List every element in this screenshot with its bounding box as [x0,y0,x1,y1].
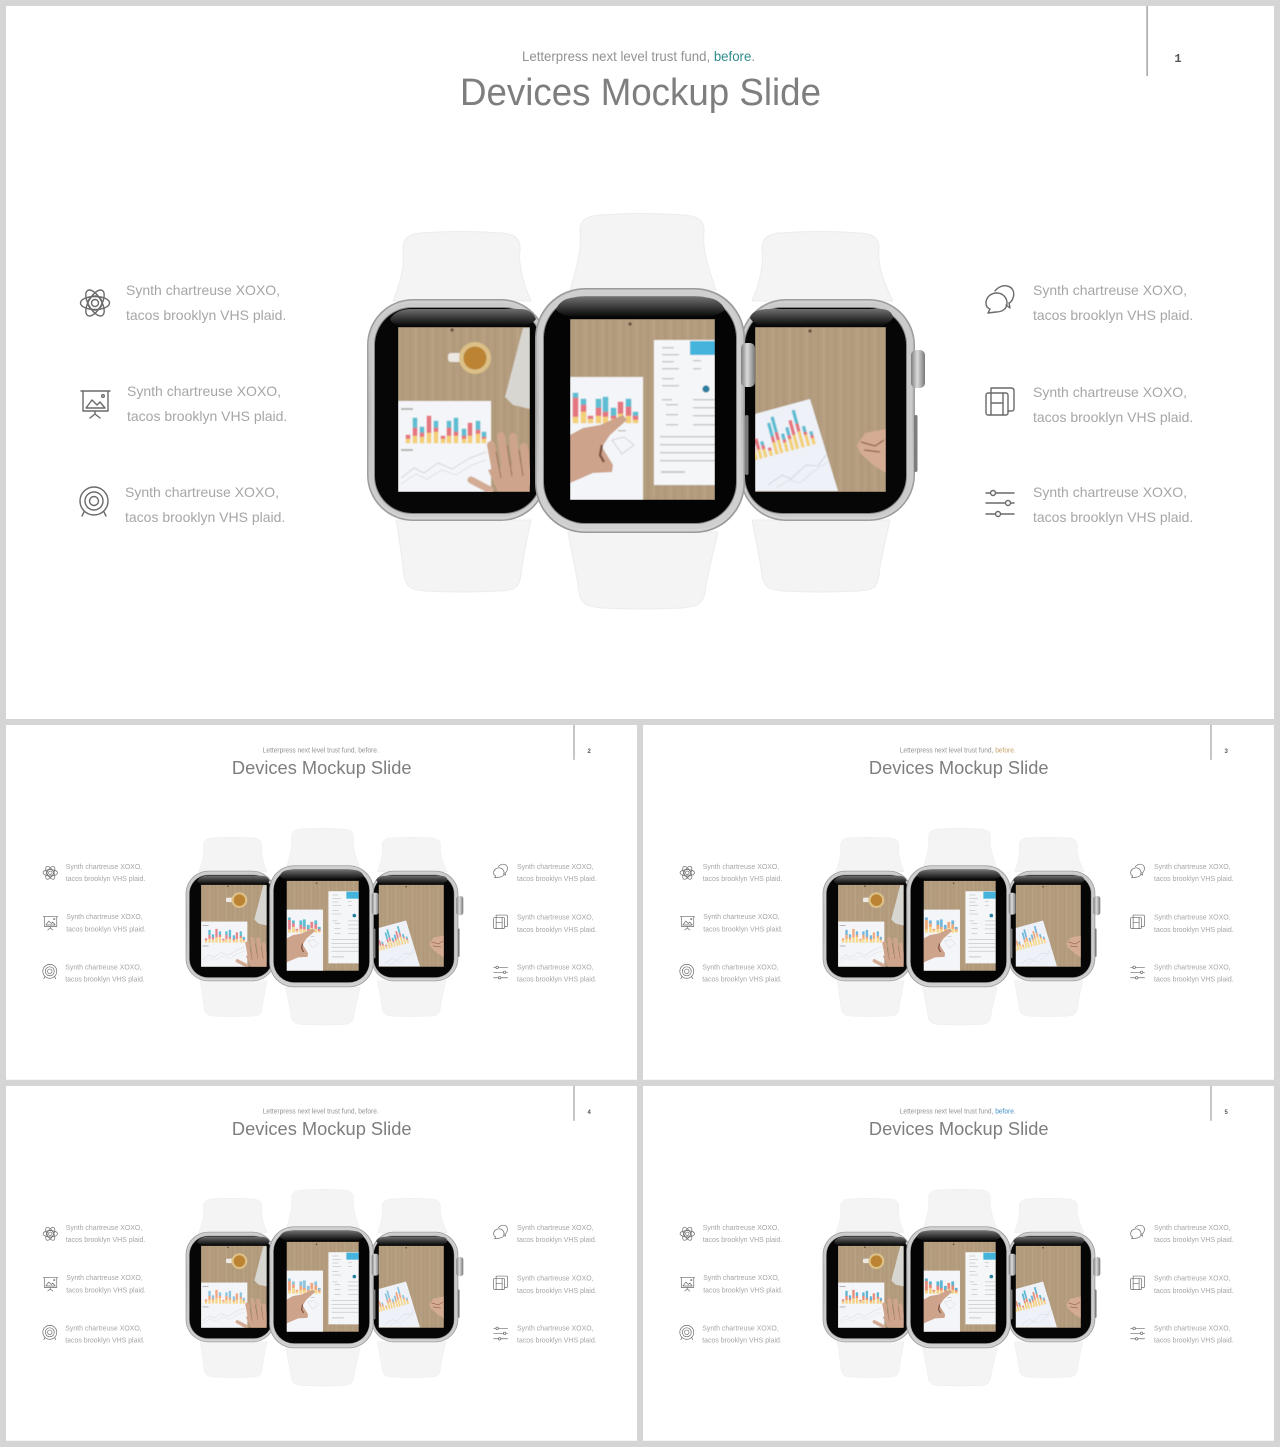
text block: left 2: tacos brooklyn VHS plaid. [66,1288,146,1295]
text block: right 2: Synth chartreuse XOXO, [1154,915,1231,922]
text block: left 2: Synth chartreuse XOXO, [66,914,143,921]
text block: left 2: Synth chartreuse XOXO, [66,1275,143,1282]
text block: left 2: Synth chartreuse XOXO, [703,914,780,921]
page number: 4 [587,1109,591,1116]
text block: right 3: Synth chartreuse XOXO, [1154,964,1231,971]
text block: right 2: tacos brooklyn VHS plaid. [1154,1288,1234,1295]
text block: right 2: tacos brooklyn VHS plaid. [517,1288,597,1295]
title: Devices Mockup Slide [232,1119,412,1140]
text block: right 3: tacos brooklyn VHS plaid. [517,977,597,984]
text block: left 2: tacos brooklyn VHS plaid. [703,927,783,934]
text block: right 2: Synth chartreuse XOXO, [517,1276,594,1283]
text block: right 3: Synth chartreuse XOXO, [517,1325,594,1332]
text block: right 2: tacos brooklyn VHS plaid. [517,927,597,934]
text block: left 2: tacos brooklyn VHS plaid. [127,408,287,424]
icon: target [43,964,57,979]
text block: right 1: Synth chartreuse XOXO, [517,864,594,871]
text block: left 1: Synth chartreuse XOXO, [66,1225,142,1232]
title: Devices Mockup Slide [232,758,412,779]
text block: left 1: tacos brooklyn VHS plaid. [66,1237,145,1244]
page number divider [1146,6,1148,76]
text block: right 3: Synth chartreuse XOXO, [1154,1325,1231,1332]
page number: 3 [1224,748,1228,755]
icon: atom [43,865,58,881]
title: Devices Mockup Slide [869,758,1049,779]
watch mockups [186,828,463,1025]
text block: right 3: Synth chartreuse XOXO, [1033,484,1187,500]
title: Devices Mockup Slide [869,1119,1049,1140]
text block: left 1: tacos brooklyn VHS plaid. [66,876,145,883]
text block: right 1: tacos brooklyn VHS plaid. [1033,307,1193,323]
page number divider [573,725,576,760]
text block: left 3: tacos brooklyn VHS plaid. [65,977,145,984]
icon: presentation easel [81,391,110,418]
subtitle: Letterpress next level trust fund, before. [522,48,755,64]
icon: film frames [986,388,1014,415]
icon: sliders [1131,966,1145,979]
text block: left 3: Synth chartreuse XOXO, [702,1325,779,1332]
text block: left 1: Synth chartreuse XOXO, [66,864,142,871]
text block: left 2: Synth chartreuse XOXO, [127,383,281,399]
icon: presentation easel [43,917,58,930]
icon: sliders [1131,1327,1145,1340]
icon: target [680,1325,694,1340]
text block: right 2: tacos brooklyn VHS plaid. [1154,927,1234,934]
subtitle: Letterpress next level trust fund, before. [900,747,1016,754]
subtitle: Letterpress next level trust fund, before. [263,1108,379,1115]
text block: left 1: Synth chartreuse XOXO, [126,282,280,298]
text block: right 1: Synth chartreuse XOXO, [1154,1225,1231,1232]
page number: 2 [587,748,591,755]
text block: left 3: Synth chartreuse XOXO, [65,964,142,971]
text block: right 1: Synth chartreuse XOXO, [517,1225,594,1232]
text block: left 3: Synth chartreuse XOXO, [65,1325,142,1332]
text block: left 2: tacos brooklyn VHS plaid. [66,927,146,934]
text block: left 2: Synth chartreuse XOXO, [703,1275,780,1282]
text block: right 1: Synth chartreuse XOXO, [1033,282,1187,298]
text block: left 2: tacos brooklyn VHS plaid. [703,1288,783,1295]
title: Devices Mockup Slide [460,72,821,114]
icon: atom [80,287,110,319]
text block: right 2: Synth chartreuse XOXO, [1033,384,1187,400]
watch mockups [823,828,1100,1025]
text block: right 3: Synth chartreuse XOXO, [517,964,594,971]
icon: atom [680,865,695,881]
text block: left 1: tacos brooklyn VHS plaid. [126,307,286,323]
icon: film frames [1131,915,1145,929]
page number: 5 [1224,1109,1228,1116]
icon: chat bubbles [986,286,1014,313]
text block: right 2: Synth chartreuse XOXO, [1154,1276,1231,1283]
icon: chat bubbles [1131,1225,1144,1239]
icon: presentation easel [680,917,695,930]
icon: chat bubbles [1131,864,1144,878]
icon: film frames [494,915,508,929]
panel: slide 2 [6,725,637,1080]
subtitle: Letterpress next level trust fund, before. [900,1108,1016,1115]
watch mockups [186,1189,463,1386]
icon: sliders [494,966,508,979]
text block: right 2: Synth chartreuse XOXO, [517,915,594,922]
panel: slide 3 [643,725,1274,1080]
panel: slide 4 [6,1086,637,1441]
text block: right 3: tacos brooklyn VHS plaid. [1154,1338,1234,1345]
text block: right 1: tacos brooklyn VHS plaid. [1154,876,1234,883]
icon: film frames [494,1276,508,1290]
icon: presentation easel [680,1278,695,1291]
icon: sliders [494,1327,508,1340]
page number divider [573,1086,576,1121]
text block: right 2: tacos brooklyn VHS plaid. [1033,409,1193,425]
panel: slide 5 [643,1086,1274,1441]
watch mockups [367,214,925,609]
text block: right 3: tacos brooklyn VHS plaid. [517,1338,597,1345]
text block: right 3: tacos brooklyn VHS plaid. [1154,977,1234,984]
text block: left 3: tacos brooklyn VHS plaid. [125,509,285,525]
icon: atom [680,1226,695,1242]
icon: target [80,487,108,516]
text block: right 3: tacos brooklyn VHS plaid. [1033,509,1193,525]
text block: left 1: tacos brooklyn VHS plaid. [703,1237,782,1244]
text block: right 1: tacos brooklyn VHS plaid. [517,1237,597,1244]
text block: right 1: tacos brooklyn VHS plaid. [1154,1237,1234,1244]
icon: presentation easel [43,1278,58,1291]
panel: main slide 1 [6,6,1274,719]
text block: left 3: Synth chartreuse XOXO, [702,964,779,971]
page number: 1 [1174,52,1182,66]
text block: left 3: Synth chartreuse XOXO, [125,484,279,500]
icon: target [43,1325,57,1340]
text block: left 3: tacos brooklyn VHS plaid. [702,977,782,984]
icon: sliders [986,490,1014,516]
icon: film frames [1131,1276,1145,1290]
text block: left 1: tacos brooklyn VHS plaid. [703,876,782,883]
icon: chat bubbles [494,864,507,878]
page number divider [1210,725,1213,760]
icon: atom [43,1226,58,1242]
icon: chat bubbles [494,1225,507,1239]
page number divider [1210,1086,1213,1121]
subtitle: Letterpress next level trust fund, before. [263,747,379,754]
text block: left 1: Synth chartreuse XOXO, [703,864,779,871]
watch mockups [823,1189,1100,1386]
text block: left 3: tacos brooklyn VHS plaid. [65,1338,145,1345]
icon: target [680,964,694,979]
text block: left 3: tacos brooklyn VHS plaid. [702,1338,782,1345]
text block: right 1: tacos brooklyn VHS plaid. [517,876,597,883]
text block: left 1: Synth chartreuse XOXO, [703,1225,779,1232]
text block: right 1: Synth chartreuse XOXO, [1154,864,1231,871]
